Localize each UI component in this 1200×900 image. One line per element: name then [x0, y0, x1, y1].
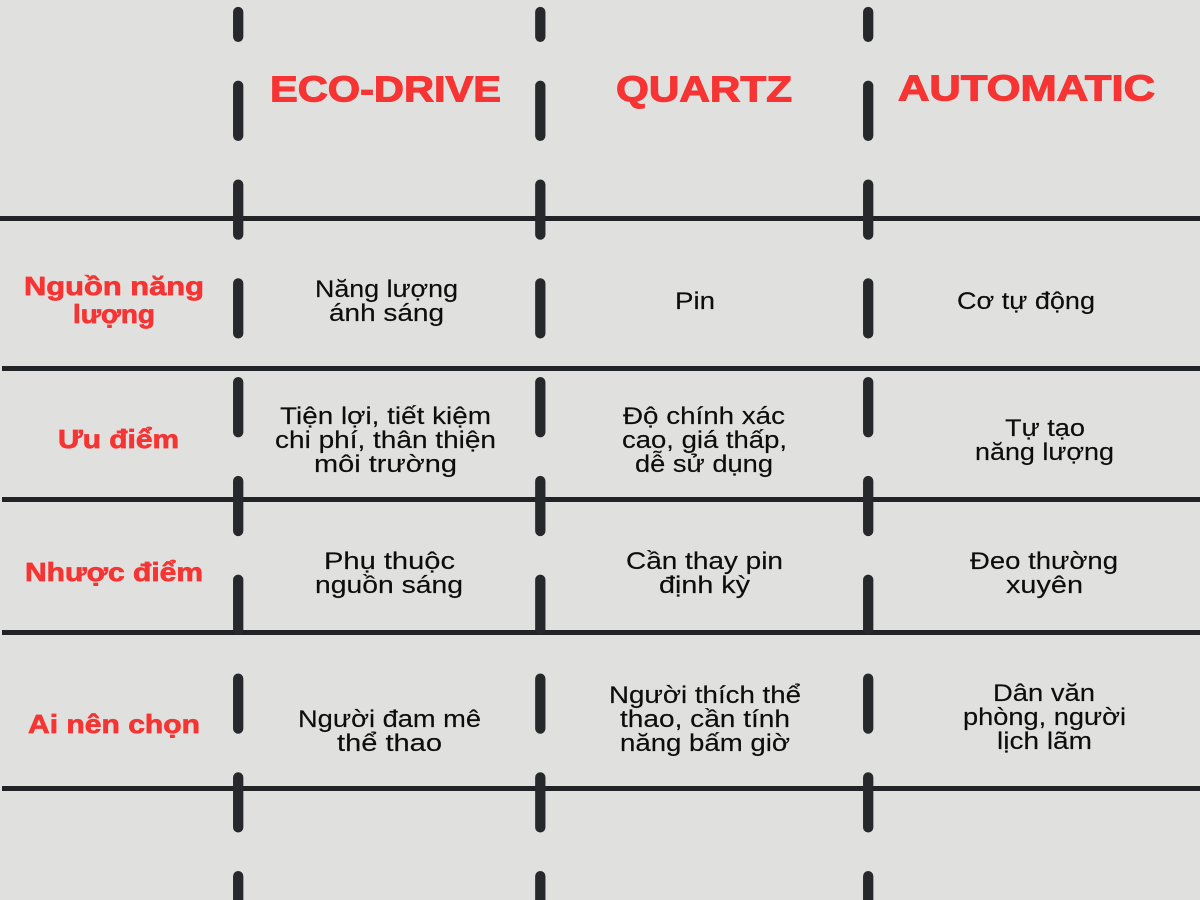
cell: Quartz advantages: dễ sử dụng [635, 451, 773, 478]
cell: Quartz energy source: Pin [675, 288, 715, 315]
cell: Automatic buyer: phòng, người [963, 704, 1126, 731]
row label: energy source: lượng [73, 299, 155, 329]
cell: Quartz advantages [622, 403, 787, 478]
cell: Automatic buyer: lịch lãm [997, 728, 1092, 755]
cell: Eco-Drive energy source: Năng lượng [315, 276, 458, 303]
cell: Eco-Drive buyer: Người đam mê [298, 706, 481, 733]
cell: Eco-Drive advantages: môi trường [314, 451, 457, 478]
row label: who should choose: Ai nên chọn [28, 709, 200, 739]
cell: Eco-Drive advantages [275, 403, 496, 478]
row label: energy source [24, 271, 204, 329]
cell: Eco-Drive disadvantages: nguồn sáng [315, 572, 463, 599]
cell: Quartz advantages: Độ chính xác [623, 403, 785, 430]
cell: Eco-Drive disadvantages [315, 548, 463, 599]
cell: Quartz buyer [609, 682, 801, 757]
cell: Automatic disadvantages: xuyên [1006, 572, 1083, 599]
row label: advantages: Ưu điểm [58, 424, 179, 454]
cell: Quartz disadvantages: định kỳ [659, 572, 750, 599]
cell: Quartz buyer: thao, cần tính [620, 706, 790, 733]
cell: Eco-Drive buyer [298, 706, 481, 757]
cell: Automatic advantages: năng lượng [975, 439, 1114, 466]
row label: energy source: Nguồn năng [24, 271, 204, 301]
cell: Eco-Drive advantages: Tiện lợi, tiết kiệm [280, 403, 491, 430]
cell: Quartz disadvantages [626, 548, 783, 599]
cell: Quartz disadvantages: Cần thay pin [626, 548, 783, 575]
cell: Automatic energy source: Cơ tự động [957, 288, 1095, 315]
column heading: Quartz: QUARTZ [616, 68, 792, 110]
cell: Eco-Drive disadvantages: Phụ thuộc [324, 548, 455, 575]
row label: disadvantages: Nhược điểm [25, 557, 203, 587]
cell: Automatic advantages [975, 415, 1114, 466]
cell: Eco-Drive energy source: ánh sáng [329, 300, 444, 327]
column heading: Automatic: AUTOMATIC [898, 68, 1155, 108]
cell: Automatic buyer [963, 680, 1126, 755]
cell: Quartz buyer: Người thích thể [609, 682, 801, 709]
cell: Eco-Drive buyer: thể thao [337, 730, 442, 757]
cell: Automatic disadvantages [970, 548, 1118, 599]
cell: Automatic buyer: Dân văn [993, 680, 1095, 707]
cell: Automatic disadvantages: Đeo thường [970, 548, 1118, 575]
cell: Automatic advantages: Tự tạo [1005, 415, 1085, 442]
cell: Eco-Drive advantages: chi phí, thân thiện [275, 427, 496, 454]
column heading: Eco-Drive: ECO-DRIVE [270, 68, 501, 110]
cell: Quartz buyer: năng bấm giờ [620, 730, 790, 757]
cell: Quartz advantages: cao, giá thấp, [622, 427, 787, 454]
cell: Eco-Drive energy source [315, 276, 458, 327]
